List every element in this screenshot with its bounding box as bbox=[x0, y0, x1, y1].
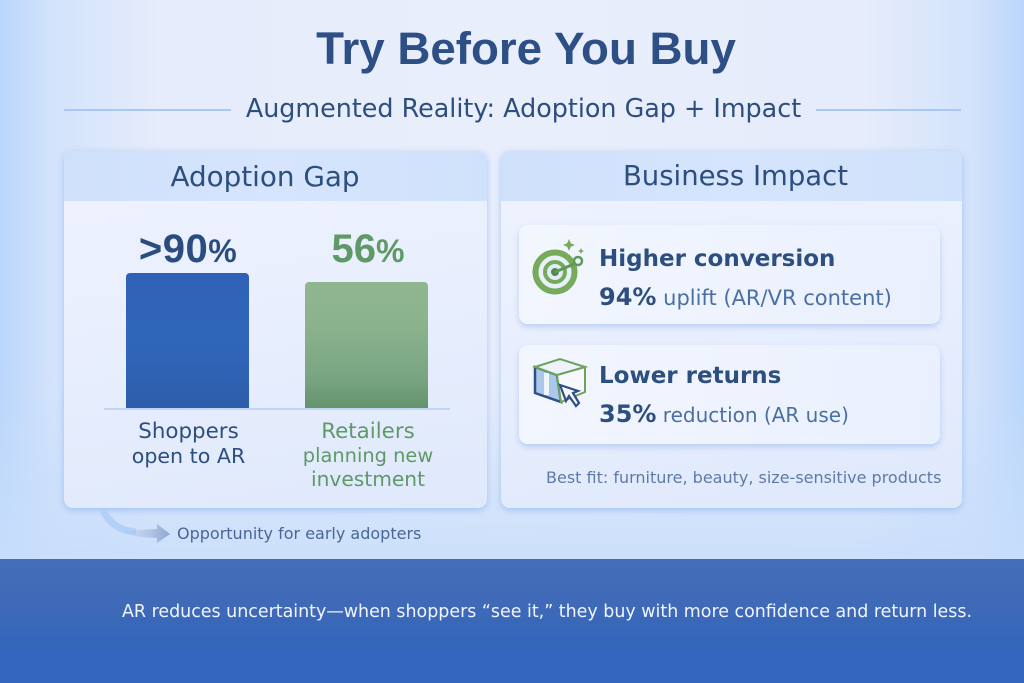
stat: 35% reduction: 35% reduction (AR use) bbox=[599, 400, 849, 428]
heading: adoption gap: Adoption Gap bbox=[170, 160, 360, 192]
bar: shoppers bbox=[126, 273, 249, 408]
heading: lower returns: Lower returns bbox=[599, 362, 781, 388]
label: shoppers bbox=[132, 419, 245, 468]
label: retailers: Retailers bbox=[321, 419, 415, 444]
panel: business impact bbox=[501, 151, 962, 508]
label: retailers: planning new bbox=[303, 444, 433, 466]
panel: adoption gap bbox=[64, 151, 487, 508]
icon: target bbox=[532, 239, 584, 294]
subtitle: Augmented Reality: Adoption Gap + Impact bbox=[246, 92, 801, 122]
footer text: AR reduces uncertainty—when shoppers “see it,” they buy with more confidence and return less. bbox=[122, 602, 972, 622]
card: higher conversion bbox=[519, 225, 940, 324]
value: shoppers: >90% bbox=[139, 227, 237, 271]
label: retailers bbox=[303, 419, 433, 491]
note: opportunity: Opportunity for early adopters bbox=[177, 524, 421, 542]
label: shoppers: open to AR bbox=[132, 444, 245, 468]
icon: box bbox=[532, 358, 588, 408]
card: lower returns bbox=[519, 345, 940, 444]
stat: 94% uplift: 94% uplift (AR/VR content) bbox=[599, 282, 892, 310]
heading: higher conversion: Higher conversion bbox=[599, 246, 835, 272]
footer banner bbox=[0, 559, 1024, 683]
label: shoppers: Shoppers bbox=[138, 419, 239, 444]
bar: retailers bbox=[305, 282, 428, 408]
title: Try Before You Buy bbox=[316, 23, 736, 74]
arrow: opportunity bbox=[100, 511, 170, 543]
label: retailers: investment bbox=[311, 467, 425, 491]
note: best fit: Best fit: furniture, beauty, size-sensitive products bbox=[546, 468, 941, 486]
heading: business impact: Business Impact bbox=[623, 160, 848, 192]
value: retailers: 56% bbox=[332, 227, 404, 271]
